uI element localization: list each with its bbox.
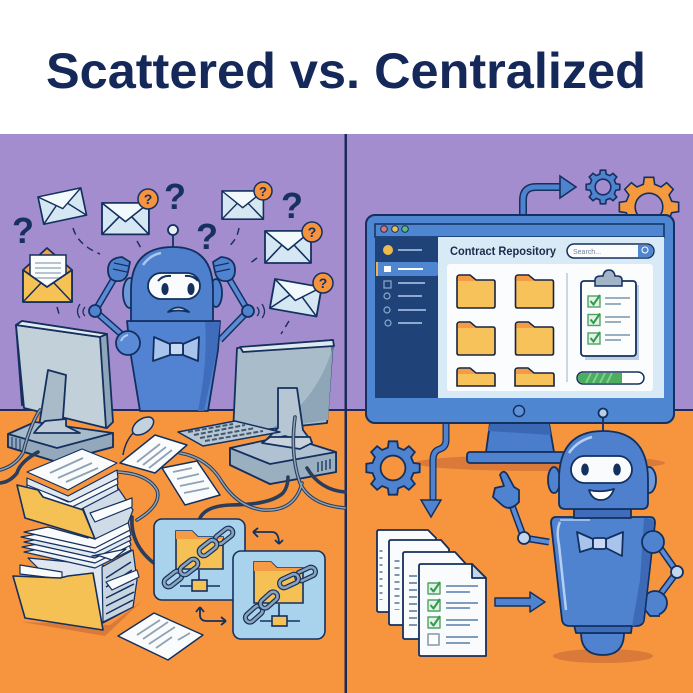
robot head [131, 247, 213, 321]
mouse [123, 413, 157, 455]
monitor shadow [415, 455, 665, 471]
search box [567, 244, 654, 258]
robot antenna [598, 408, 608, 432]
robot arm right [642, 545, 683, 616]
robot body [127, 321, 220, 411]
icon: gear orange [619, 177, 679, 237]
question marks [12, 176, 303, 257]
robot antenna [168, 225, 178, 248]
folder shadow [22, 600, 143, 636]
icon: envelope with question badge 1 [102, 189, 158, 234]
question marks: ? [12, 210, 34, 251]
icon: envelope with question badge 2: ? [259, 184, 267, 199]
left monitor [16, 321, 113, 445]
sidebar [375, 237, 438, 398]
icon: envelope with question badge 4 [270, 273, 333, 317]
panel: scattered [0, 176, 345, 660]
cables [0, 410, 345, 564]
arrow: up and right [523, 176, 576, 216]
icon: open yellow envelope [23, 248, 72, 302]
question marks: ? [164, 176, 186, 217]
monitor stand [467, 423, 566, 463]
robot shadow [553, 649, 653, 663]
title [0, 0, 693, 134]
robot bow tie [153, 337, 199, 361]
robot lower [574, 625, 632, 655]
panel: centralized [366, 170, 683, 663]
icon: envelope with question badge 3: ? [308, 224, 316, 240]
robot: stressed [89, 225, 254, 411]
arrows: sync [196, 528, 283, 625]
icon: gear lower left [366, 441, 420, 495]
right monitor [233, 340, 334, 442]
robot face [148, 273, 200, 312]
chain card 1 [154, 519, 245, 600]
monitor [366, 215, 674, 423]
progress bar [577, 372, 644, 384]
clipboard [581, 270, 639, 360]
title: Scattered vs. Centralized [46, 43, 646, 99]
lower paper stack [20, 522, 139, 623]
document stack [377, 530, 486, 656]
folders [457, 275, 554, 386]
icon: envelope with question badge 4: ? [319, 275, 327, 291]
upper folder [17, 485, 95, 539]
arrow: right [495, 592, 545, 612]
icon: gear blue [586, 170, 620, 204]
robot ears [123, 278, 222, 308]
lower folder [13, 573, 103, 630]
robot body [551, 517, 655, 626]
robot ears [548, 467, 656, 493]
robot head [559, 431, 648, 509]
question marks: ? [281, 185, 303, 226]
robot: happy [493, 408, 683, 655]
content area [438, 237, 664, 398]
robot face [571, 456, 632, 500]
search box: Search... [573, 249, 601, 256]
heading: Contract Repository: Contract Repository [450, 246, 557, 258]
document stack and folders [13, 449, 143, 636]
paper [120, 435, 187, 473]
keyboard [178, 421, 280, 446]
window title bar [375, 224, 664, 237]
robot arm left [493, 472, 549, 544]
robot neck [574, 509, 631, 518]
icon: plain envelope [38, 188, 87, 224]
icon: envelope with question badge 2 [222, 182, 272, 219]
robot shoulder [642, 531, 664, 553]
document with checklist [419, 564, 486, 656]
right computer base [230, 436, 336, 484]
upper paper stack [27, 449, 133, 539]
paper [118, 613, 203, 660]
dashed motion lines [57, 228, 289, 334]
robot arms [89, 257, 254, 340]
robot bow tie [577, 532, 623, 556]
loose papers [118, 435, 220, 660]
paper [162, 461, 220, 505]
icon: envelope with question badge 3 [265, 222, 322, 263]
arrow: down [421, 424, 446, 517]
question marks: ? [196, 216, 218, 257]
robot shoulder [116, 331, 140, 355]
chain card 2 [233, 551, 325, 639]
left computer base [8, 419, 113, 462]
icon: envelope with question badge 1: ? [144, 191, 152, 207]
